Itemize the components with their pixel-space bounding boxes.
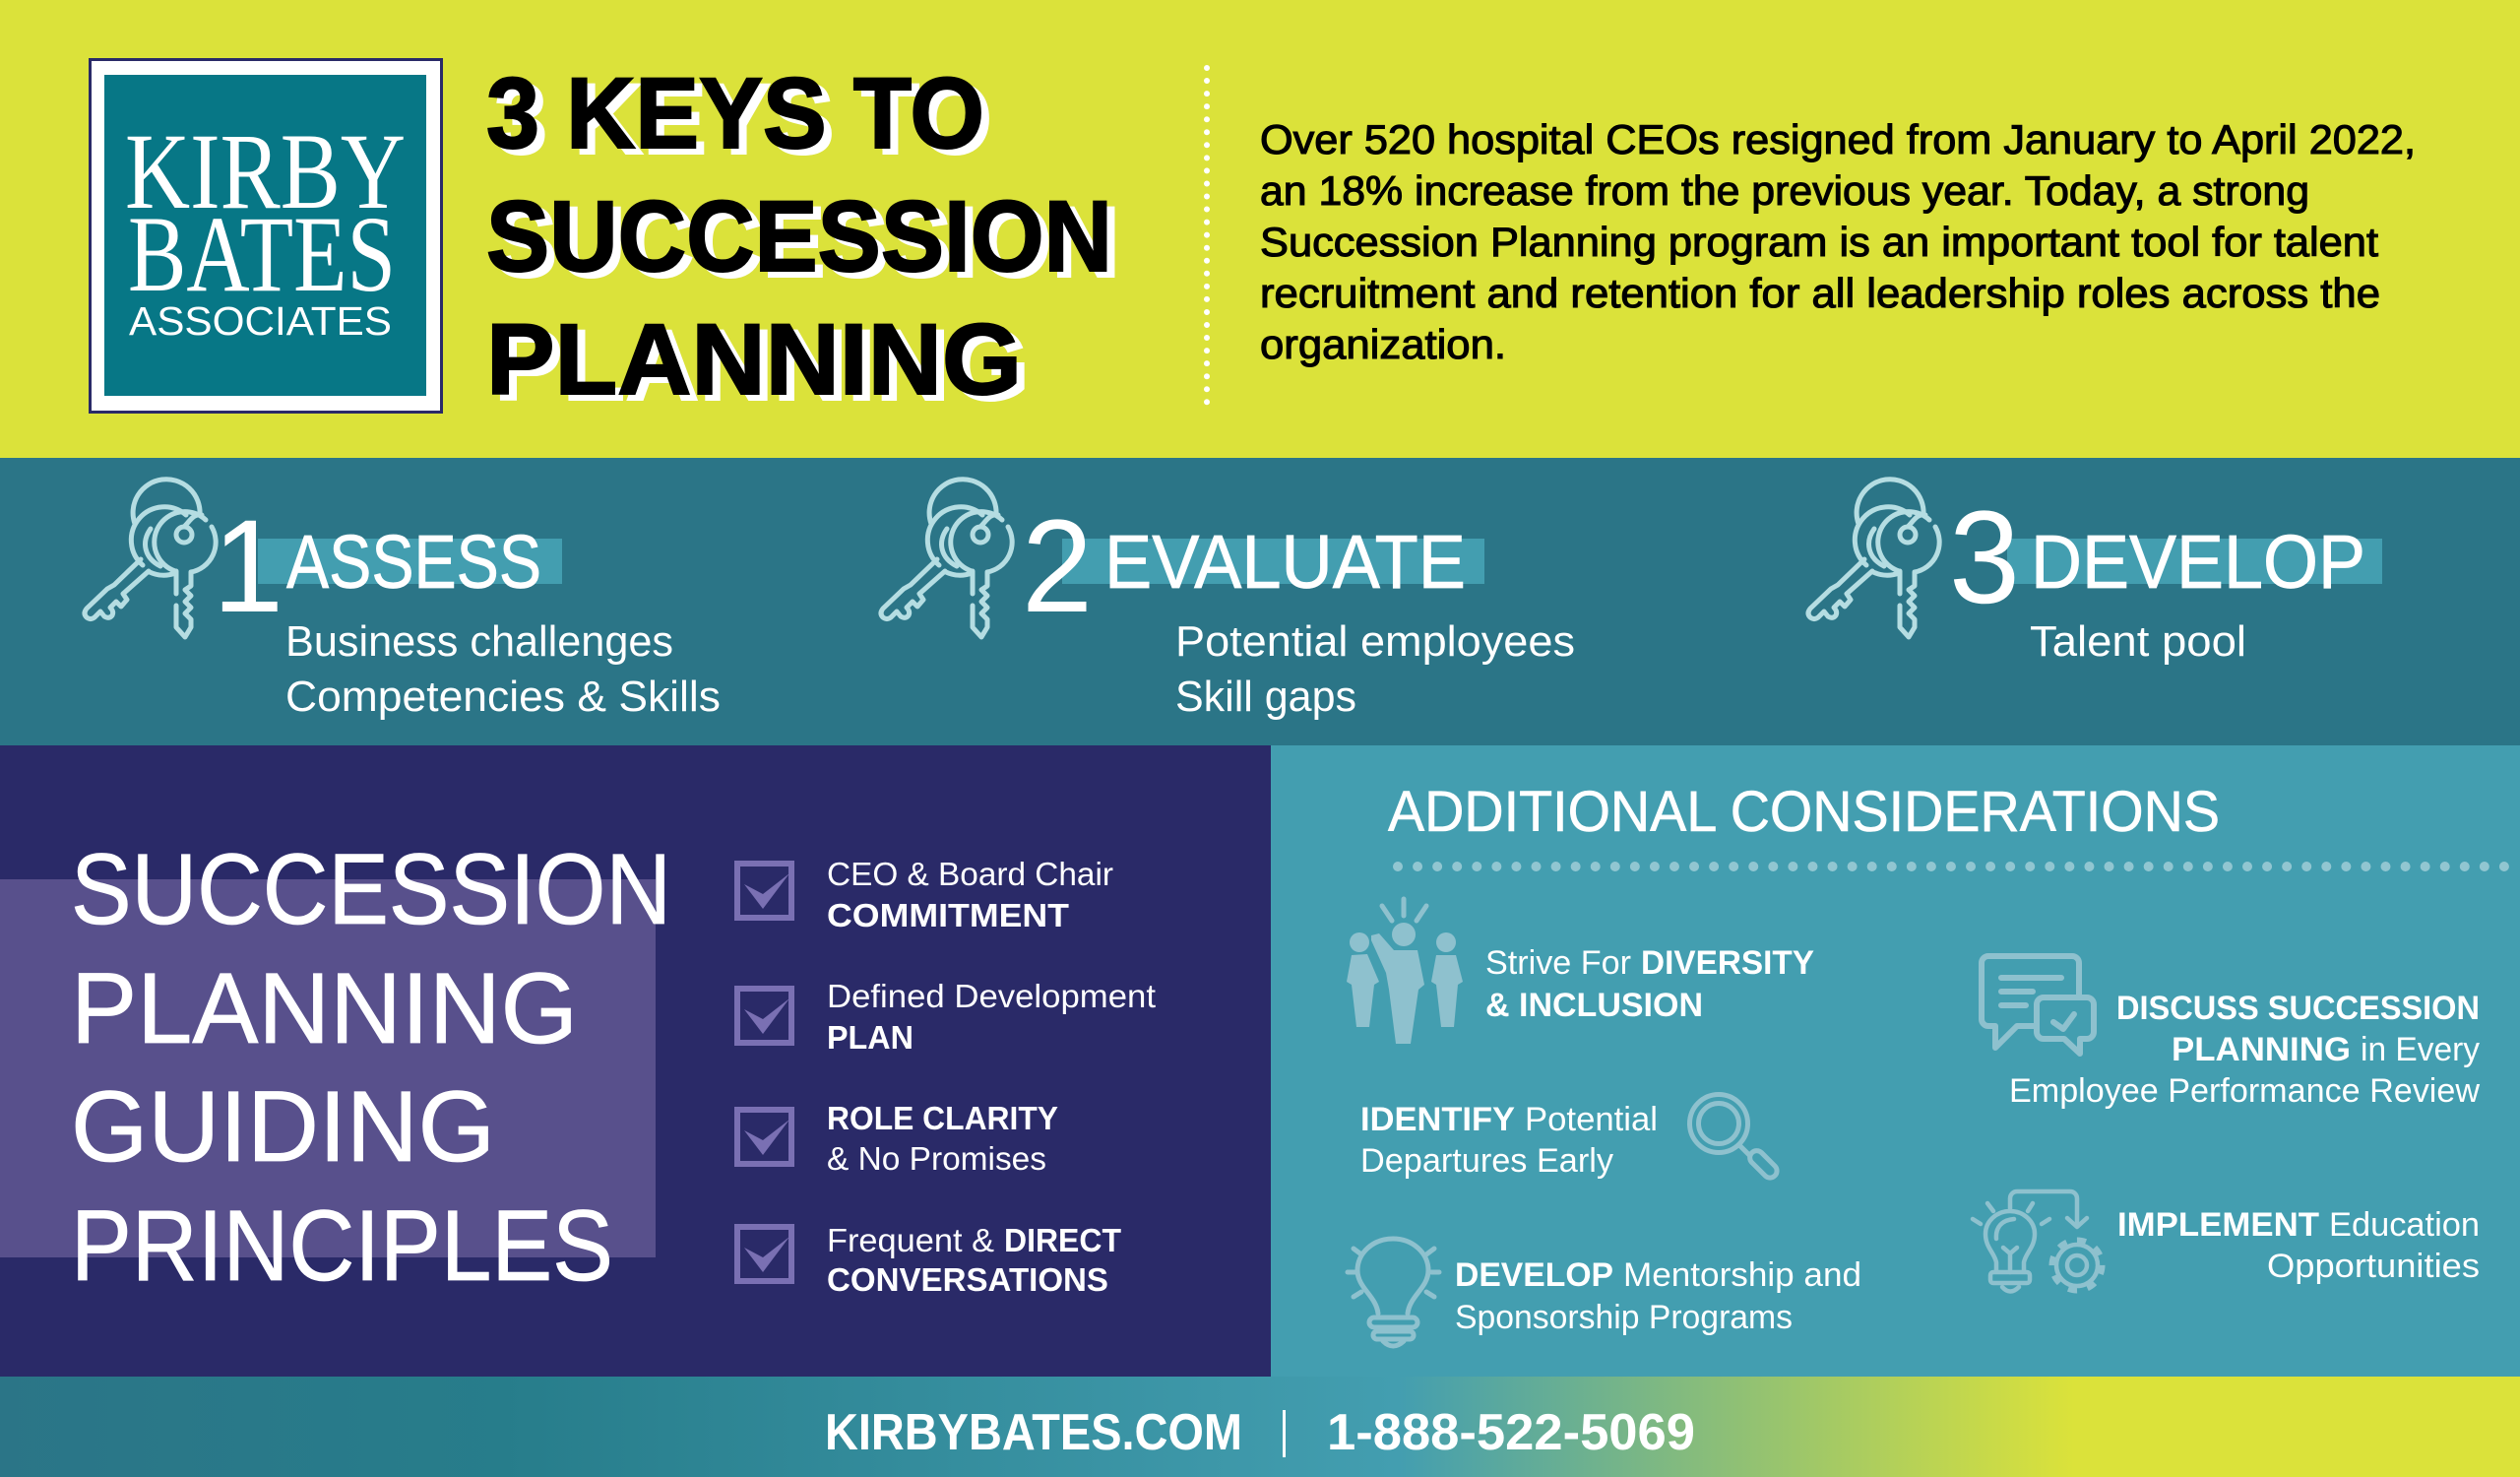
heading: develop: DEVELOP — [2031, 520, 2365, 605]
icon: chat bubbles — [1982, 956, 2094, 1054]
label: Sponsorship Programs — [1455, 1299, 1793, 1336]
icon: checkbox — [737, 864, 791, 918]
label: DEVELOP — [1455, 1256, 1613, 1294]
label: DIVERSITY — [1641, 944, 1814, 982]
icon: bulb, arrow and gear — [1973, 1191, 2102, 1292]
label — [1485, 944, 1814, 1024]
key 3: develop — [1808, 480, 2382, 666]
icon: keys — [1808, 480, 1939, 637]
label: DISCUSS SUCCESSION — [2116, 990, 2480, 1027]
label: & INCLUSION — [1485, 987, 1703, 1024]
label: Opportunities — [2267, 1248, 2480, 1285]
icon: checkbox — [737, 1227, 791, 1281]
intro paragraph: Over 520 hospital CEOs resigned from January to April 2022, — [1260, 116, 2416, 162]
label: CONVERSATIONS — [827, 1261, 1108, 1298]
label — [827, 856, 1113, 933]
key 1: assess — [85, 480, 721, 721]
key 2: evaluate — [881, 480, 1575, 721]
panel: header — [0, 0, 2520, 458]
checklist item 4 — [737, 1222, 1121, 1298]
checklist item 3 — [737, 1100, 1058, 1177]
description: Business challenges — [285, 617, 673, 666]
description: Competencies & Skills — [285, 673, 721, 721]
description — [285, 617, 721, 721]
label: COMMITMENT — [827, 897, 1069, 933]
heading — [71, 833, 671, 1302]
numeral 1: 1 — [213, 493, 284, 640]
panel: three keys band — [0, 458, 2520, 745]
heading: GUIDING — [71, 1070, 495, 1183]
heading: PLANNING — [71, 952, 578, 1064]
heading: ADDITIONAL CONSIDERATIONS — [1388, 780, 2220, 844]
intro paragraph: recruitment and retention for all leadership roles across the — [1260, 270, 2380, 316]
item: develop mentorship — [1348, 1239, 1861, 1346]
highlight bar — [258, 539, 562, 584]
label: Mentorship and — [1623, 1256, 1861, 1294]
website: KIRBYBATES.COM — [825, 1404, 1242, 1461]
description: Potential employees — [1175, 617, 1575, 666]
logo: Kirby Bates Associates: BATES — [128, 194, 396, 314]
checklist item 1 — [737, 856, 1113, 933]
separator — [1283, 1410, 1286, 1457]
title — [486, 57, 1120, 421]
footer — [0, 1377, 2520, 1477]
heading: assess: ASSESS — [286, 520, 541, 605]
label — [827, 1100, 1058, 1177]
label — [1360, 1101, 1658, 1180]
label: PLAN — [827, 1019, 914, 1056]
description: Skill gaps — [1175, 673, 1356, 721]
label: in Every — [2361, 1031, 2480, 1068]
intro paragraph: an 18% increase from the previous year. Today, a strong — [1260, 167, 2309, 214]
panel: succession planning guiding principles — [0, 745, 1271, 1377]
label — [2117, 1206, 2480, 1285]
title: PLANNING — [486, 303, 1022, 416]
icon: people — [1347, 899, 1463, 1044]
title: PLANNING — [494, 309, 1030, 421]
label: Education — [2329, 1206, 2480, 1244]
numeral 2: 2 — [1022, 493, 1093, 640]
label: PLANNING — [2172, 1031, 2351, 1068]
logo: Kirby Bates Associates: ASSOCIATES — [129, 298, 392, 344]
item: discuss succession planning — [1982, 956, 2480, 1110]
label: DIRECT — [1004, 1222, 1121, 1258]
title: SUCCESSION — [494, 186, 1120, 298]
title: 3 KEYS TO — [486, 57, 984, 169]
icon: keys — [85, 480, 216, 637]
intro paragraph — [1260, 116, 2416, 367]
label: & No Promises — [827, 1140, 1046, 1177]
label: Potential — [1525, 1101, 1658, 1138]
highlight bar — [1062, 539, 1484, 584]
heading: evaluate: EVALUATE — [1104, 520, 1466, 605]
label: Departures Early — [1360, 1142, 1613, 1180]
heading: SUCCESSION — [71, 833, 671, 945]
title: 3 KEYS TO — [494, 63, 992, 175]
label — [827, 978, 1156, 1056]
label: Employee Performance Review — [2009, 1072, 2480, 1110]
icon: magnifier — [1689, 1095, 1780, 1181]
intro paragraph: Succession Planning program is an important tool for talent — [1260, 219, 2378, 265]
label — [1455, 1256, 1861, 1336]
item: diversity — [1347, 899, 1814, 1044]
label — [827, 1222, 1121, 1298]
highlight bar — [2007, 539, 2382, 584]
phone number: 1-888-522-5069 — [1327, 1404, 1695, 1461]
purple accent block — [0, 879, 656, 1257]
label: CEO & Board Chair — [827, 856, 1113, 892]
intro paragraph: organization. — [1260, 321, 1506, 367]
label: Strive For — [1485, 944, 1631, 982]
icon: keys — [881, 480, 1012, 637]
logo: Kirby Bates Associates — [91, 59, 441, 412]
label: IDENTIFY — [1360, 1101, 1515, 1138]
label: IMPLEMENT — [2117, 1206, 2319, 1244]
checklist item 2 — [737, 978, 1156, 1056]
label — [2009, 990, 2480, 1110]
label: ROLE CLARITY — [827, 1100, 1058, 1136]
description — [1175, 617, 1575, 721]
item: identify — [1360, 1095, 1780, 1181]
icon: checkbox — [737, 1110, 791, 1164]
logo: Kirby Bates Associates: KIRBY — [125, 111, 406, 231]
panel: additional considerations — [1271, 745, 2520, 1377]
icon: light bulb — [1348, 1239, 1439, 1346]
heading: PRINCIPLES — [71, 1189, 613, 1302]
item: implement education — [1973, 1191, 2480, 1292]
label: Defined Development — [827, 978, 1156, 1014]
description: Talent pool — [2030, 617, 2246, 666]
title: SUCCESSION — [486, 180, 1112, 292]
label: Frequent & — [827, 1222, 994, 1258]
numeral 3: 3 — [1949, 484, 2020, 631]
icon: checkbox — [737, 989, 791, 1043]
